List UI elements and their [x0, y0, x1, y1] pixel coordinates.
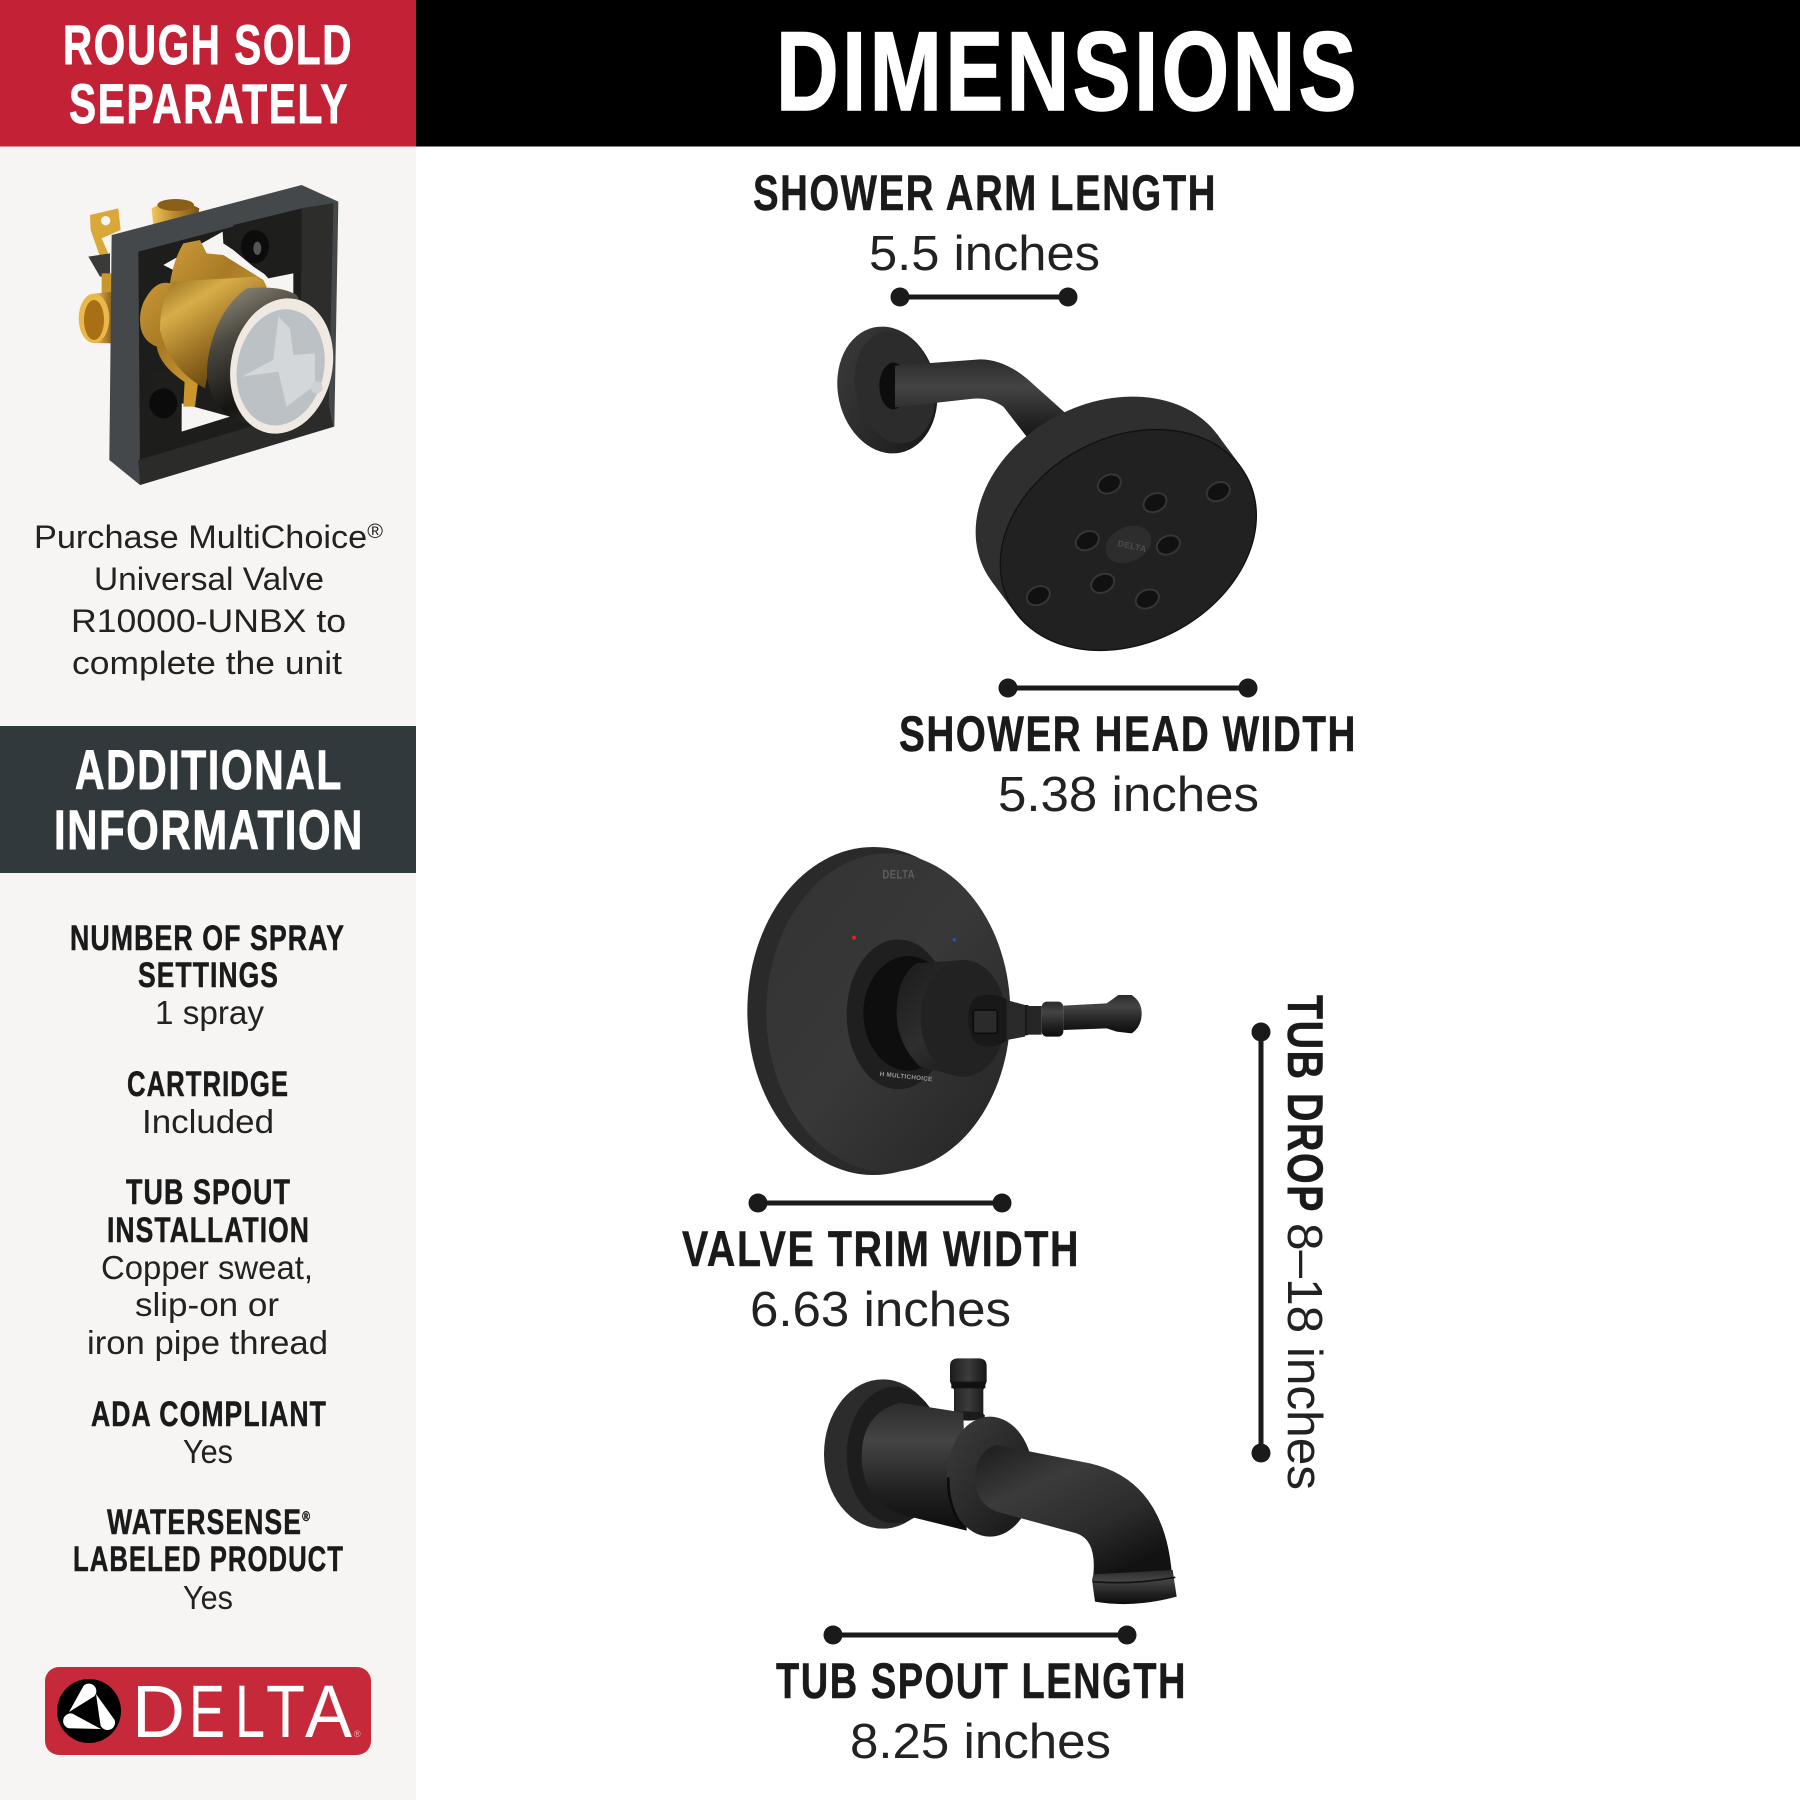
heading: additional information: INFORMATION — [54, 798, 364, 861]
logo: delta: D — [132, 1670, 185, 1753]
spec: watersense labeled product: LABELED PRODUCT — [73, 1540, 344, 1579]
heading: additional information: ADDITIONAL — [75, 738, 343, 801]
dimension: shower arm length: 5.5 inches — [869, 227, 1100, 281]
text: purchase note: R10000-UNBX to — [71, 603, 346, 639]
dimension: tub spout length: TUB SPOUT LENGTH — [776, 1653, 1187, 1709]
image: shower head and arm: DELTA — [1117, 538, 1148, 554]
spec: tub spout installation: INSTALLATION — [107, 1211, 310, 1250]
image: valve trim and handle: H MULTICHOICE — [879, 1071, 933, 1083]
header banner: rough sold separately — [0, 0, 416, 146]
logo: delta: ® — [354, 1729, 361, 1739]
title: dimensions: DIMENSIONS — [776, 9, 1360, 134]
header banner: rough sold separately: ROUGH SOLD — [63, 13, 353, 76]
panel: left sidebar — [0, 146, 416, 1800]
spec: watersense labeled product: ® — [302, 1508, 311, 1524]
spec: tub spout installation: Copper sweat, — [101, 1249, 313, 1286]
spec: watersense labeled product: WATERSENSE — [107, 1503, 363, 1542]
text: purchase note: Purchase MultiChoice — [34, 519, 345, 555]
spec: number of spray settings: SETTINGS — [138, 956, 279, 995]
text: purchase note: Universal Valve — [94, 561, 324, 597]
spec: tub spout installation: TUB SPOUT — [126, 1173, 291, 1212]
dimension: shower head width: 5.38 inches — [998, 768, 1259, 822]
dimension: tub drop: 8–18 inches — [1277, 1223, 1331, 1490]
text: purchase note — [34, 519, 383, 681]
spec: cartridge: Included — [142, 1103, 274, 1140]
title: dimensions — [416, 0, 1800, 146]
spec: tub spout installation: iron pipe thread — [87, 1324, 328, 1361]
spec: ada compliant — [91, 1395, 327, 1470]
spec: watersense labeled product: Yes — [183, 1579, 233, 1616]
spec: number of spray settings — [70, 919, 345, 1031]
spec: tub spout installation: slip-on or — [135, 1286, 279, 1323]
logo: delta: A — [305, 1670, 353, 1753]
image: valve trim and handle — [747, 847, 1142, 1175]
spec: ada compliant: Yes — [183, 1433, 233, 1470]
logo: delta: L — [235, 1670, 265, 1753]
dimension: valve trim width: VALVE TRIM WIDTH — [682, 1221, 1080, 1277]
logo: delta: T — [266, 1670, 305, 1753]
spec: number of spray settings: NUMBER OF SPRAY — [70, 919, 345, 958]
dimension: shower arm length — [753, 165, 1217, 306]
text: purchase note: complete the unit — [72, 645, 342, 681]
logo: delta — [45, 1667, 371, 1755]
image: tub spout — [824, 1358, 1177, 1604]
spec: tub spout installation — [87, 1173, 328, 1361]
dimension: tub drop — [1252, 995, 1333, 1490]
heading: additional information — [0, 726, 416, 873]
dimension: valve trim width — [682, 1194, 1080, 1337]
dimension: shower head width — [899, 678, 1357, 822]
image: shower head and arm — [826, 317, 1295, 694]
dimension: shower arm length: SHOWER ARM LENGTH — [753, 165, 1217, 221]
header banner: rough sold separately: SEPARATELY — [69, 72, 349, 135]
spec: ada compliant: ADA COMPLIANT — [91, 1395, 327, 1434]
spec: number of spray settings: 1 spray — [155, 994, 265, 1031]
dimension: tub spout length — [776, 1626, 1187, 1769]
text: purchase note: ® — [367, 521, 383, 543]
image: valve trim and handle: DELTA — [882, 868, 915, 882]
spec: watersense labeled product — [73, 1503, 344, 1616]
dimension: valve trim width: 6.63 inches — [750, 1283, 1011, 1337]
dimension: tub drop: TUB DROP — [1277, 995, 1333, 1213]
logo: delta: E — [189, 1670, 225, 1753]
dimension: shower head width: SHOWER HEAD WIDTH — [899, 706, 1357, 762]
dimension: tub spout length: 8.25 inches — [850, 1715, 1111, 1769]
spec: cartridge — [127, 1065, 289, 1140]
image: rough-in valve — [79, 185, 345, 485]
spec: cartridge: CARTRIDGE — [127, 1065, 289, 1104]
